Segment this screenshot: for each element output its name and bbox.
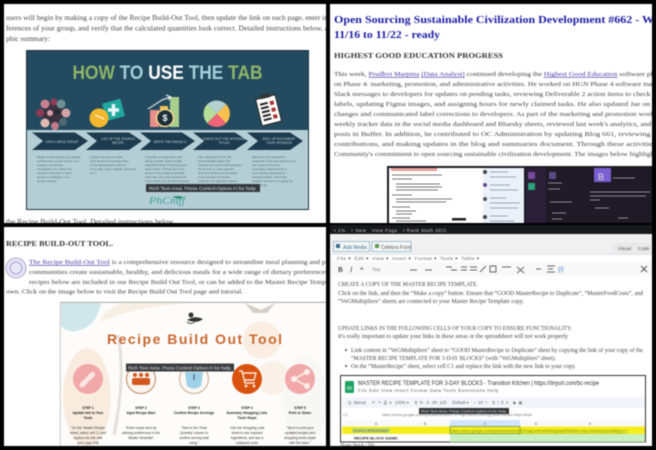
article body: weekly tracker data in the social media dashboard and Bluesky sheets, reviewed last week's analytics, and s: [334, 121, 656, 128]
panel: wordpress editor: Share Stock / Dir: [340, 444, 375, 448]
step descriptions: the recipe of the tool,: [252, 163, 281, 167]
article body: Slack messages to developers for updates on pending tasks, reviewing Deliverable 2 action items to check p: [334, 91, 656, 98]
icon: people group: [36, 98, 70, 130]
editor content: It's really important to update your links in these areas or the spreadsheet will not work properly: [338, 334, 568, 340]
editor content: [332, 276, 652, 446]
step descriptions: ingredients, and see a: [231, 436, 263, 440]
icon: round seal: [6, 258, 26, 278]
tooltip: Rich Text Area. Press Control-Option-H for help.: [128, 366, 232, 370]
step descriptions: "Send or print your: [286, 426, 315, 430]
editor tabs: Code: [638, 246, 650, 252]
step descriptions: [37, 155, 296, 187]
formatting toolbar: I: [349, 266, 353, 274]
tooltip: Rich Text Area. Press Control-Option-H for help.: [149, 186, 257, 191]
intro text: own. Click on the image below to visit the Recipe Build Out Tool page and tutorial.: [6, 288, 243, 296]
admin bar: [330, 225, 652, 234]
step descriptions: necessary adjustments to: [252, 167, 287, 171]
panel: wordpress editor: [330, 225, 652, 448]
step descriptions: "Use the Shopping Lists: [229, 426, 265, 430]
panel: recipe build-out tool: [4, 227, 329, 448]
tooltip: [146, 184, 260, 192]
step captions: [73, 406, 311, 420]
icon: capsule and plus: [90, 99, 125, 128]
icon: people step: [126, 364, 156, 394]
step descriptions: group in a diagram on a: [37, 175, 70, 179]
icon: cart step: [232, 364, 262, 394]
step descriptions: ingredient base is being grown: [145, 163, 187, 167]
chevron labels: ROLL UP DOCUMENT: [263, 137, 295, 141]
intro text: The Recipe Build-Out Tool is a comprehensive resource designed to streamline meal planning and pr: [29, 259, 329, 266]
article title: Open Sourcing Sustainable Civilization Development #662 - W: [334, 15, 655, 26]
logo bird: [187, 312, 203, 324]
step descriptions: having recipes, check the: [252, 175, 287, 179]
editor content: On the “MasterRecipe” sheet, select cell C1 and replace the link with the new link to your copy.: [351, 363, 576, 370]
step descriptions: Based on the calculated: [252, 155, 285, 159]
step captions: Update link to Your: [73, 411, 104, 415]
article body: on Phase 4: marketing, promotion, and administrative activities. He worked on HGN Phase 4 software man: [334, 81, 656, 88]
editor content: Click on the link, and then the “Make a copy” button. Ensure that “GOOD MasterRecipe to Duplicate”, “MasterFoodCosts”, and: [338, 290, 643, 297]
step descriptions: flexitarians, etc. Enter the: [37, 167, 72, 171]
media buttons: [334, 242, 412, 252]
formatting toolbar: “: [360, 266, 364, 274]
formatting toolbar: B: [338, 266, 343, 274]
step captions: Tools: [84, 416, 93, 420]
recipe block name row: RECIPE BLOCK NAME:: [354, 436, 398, 440]
admin bar: ▪ 1% + New View Page ▪ Rank Math SEO: [334, 228, 446, 234]
screenshot collage: [387, 166, 655, 224]
step captions: STEP 3: [188, 406, 200, 410]
formatting toolbar: [337, 264, 648, 274]
step descriptions: using.": [189, 441, 200, 445]
step descriptions: group of two regions detailed: [145, 171, 185, 175]
step descriptions: number of people in each: [37, 171, 72, 175]
chevron labels: GATH LARGE GROUP: [46, 140, 78, 144]
spreadsheet screenshot: C1: [343, 413, 348, 417]
yellow source row: [342, 426, 645, 434]
article body: posts in Buffer. In addition, he contributed to OC Administration by updating Blog 661, reviewing c: [334, 131, 656, 138]
spreadsheet screenshot: MASTER RECIPE TEMPLATE FOR 3-DAY BLOCKS - Transition Kitchen | https://tinyurl.com/bc-recipe: [358, 381, 600, 387]
logo: PhCmff: [148, 195, 187, 207]
step descriptions: with the team.": [289, 441, 312, 445]
section heading: HIGHEST GOOD EDUCATION PROGRESS: [334, 51, 503, 60]
editor content: “VeGMultipliers” sheets are connected to your Master Recipe Template copy.: [338, 298, 524, 305]
chevron labels: TITLES: [219, 141, 229, 145]
column headers: B: [424, 422, 427, 426]
article body: [334, 71, 656, 158]
infographic title: HOW TO USE THE TAB: [72, 63, 262, 84]
spreadsheet screenshot: https://docs.google.com/spreadsheets/d/1VFmgLm6mA2NM3gOpfAPh8blkx-h4pLmhds: [382, 413, 532, 417]
chevron labels: WRITE THE RANGE S: [154, 140, 186, 144]
article body: changes and communicated label corrections to developers. As part of the marketing and promotion work,: [334, 111, 656, 118]
step captions: Confirm Recipe Servings: [174, 411, 214, 415]
intro text: recipes below are included in our Recipe Build Out Tool, or can be added to the Master Recipe Templ: [29, 279, 328, 286]
step descriptions: The calculated Trust will: [198, 155, 231, 159]
image: recipe build out tool: [60, 302, 328, 448]
step descriptions: Quantity' column to: [180, 431, 208, 435]
step descriptions: Update the tool to make: [90, 155, 123, 159]
column headers: D: [535, 422, 538, 426]
step descriptions: clicking preferences in the: [122, 431, 160, 435]
spreadsheet screenshot: [340, 376, 646, 442]
step descriptions: matches the adjusted values: [198, 179, 238, 183]
icon: jar step: [178, 371, 210, 394]
editor content: Link content in “VeGMultipliers” sheet to “GOOD MasterRecipe to Duplicate” sheet by copying the link of your copy of the: [351, 347, 643, 354]
step descriptions: replace the link with: [74, 436, 103, 440]
icon: sheets: [345, 381, 354, 393]
tool title: Recipe Build Out Tool: [107, 331, 282, 347]
tooltip: [126, 364, 234, 372]
intro text: users will begin by making a copy of the Recipe Build-Out Tool, then update the link on each page, enter in: [6, 15, 329, 22]
step descriptions: need entries ID and find outward: [145, 179, 190, 183]
step descriptions: materials in the big selection for: [252, 159, 296, 163]
step captions: Summary Shopping Lists: [227, 411, 268, 415]
step captions: Input Recipe Bars: [127, 411, 156, 415]
recipe block name row: [354, 434, 645, 442]
article body: Community's commitment to open sourcing sustainable civilization development. The images below highlight: [334, 151, 656, 158]
menu bar: [332, 256, 652, 262]
media buttons: Add Media: [343, 245, 367, 251]
step descriptions: the to four or more groups: [198, 167, 234, 171]
step descriptions: Consider serving sizes and: [145, 155, 182, 159]
step descriptions: regular unit cost to add updated: [198, 163, 242, 167]
step descriptions: and how ideals per humanity: [198, 171, 238, 175]
icon: bar chart with coin: $: [162, 113, 168, 123]
panel: how to use the tab: [4, 4, 329, 226]
step descriptions: dietary needs. Each weight: [145, 159, 182, 163]
step descriptions: Begin by identifying your dietary: [37, 155, 81, 159]
step descriptions: your dietary preferences: [252, 171, 286, 175]
step captions: STEP 4: [241, 406, 253, 410]
media buttons: Celebra Form: [381, 245, 412, 251]
step descriptions: confirm serving total: [179, 436, 209, 440]
step descriptions: [70, 426, 316, 445]
column headers: A: [375, 422, 378, 426]
step descriptions: (e.g. bulk, local, organic, discount,: [90, 167, 137, 171]
yellow source row: https://docs.google.com/spreadsheets/d/1VFmgLm6mA2NM3gOpfAPh8blkx-h4pLmhdsWxyZ/edit#gid=0: [451, 429, 627, 433]
editor content: “MASTER RECIPE TEMPLATE FOR 3-DAY BLOCKS” (with “VeGMultipliers” sheet).: [351, 355, 556, 362]
column headers: [342, 420, 645, 426]
chevron labels: CHECK OUT THE SPONSOR: [203, 137, 246, 141]
chevron labels: RECIPE: [112, 141, 124, 145]
screenshot collage: B: [598, 172, 604, 182]
chevron labels: LIST UP THE SOURCE: [101, 137, 135, 141]
column headers: E: [589, 422, 592, 426]
step captions: STEP 5: [294, 406, 306, 410]
icon: link step: [73, 364, 103, 394]
intro text: [6, 259, 329, 296]
chevron labels: YOUR SPONSOR: [266, 141, 293, 145]
icon: bar chart with coin: [148, 95, 179, 127]
step descriptions: each week. It helps by in the: [145, 167, 184, 171]
step captions: STEP 1: [82, 406, 94, 410]
step descriptions: detailed amount of a guide for: [252, 179, 293, 183]
step descriptions: sheet, select cell C1 and: [70, 431, 106, 435]
icon: sheets: m: [347, 386, 352, 392]
step descriptions: Master Template": [128, 436, 155, 440]
intro text: ferences of your group, and verify that the calculated quantities look correct. Detailed instructions below, a: [6, 26, 328, 32]
step descriptions: "Enter recipe lines by: [125, 426, 157, 430]
step descriptions: "Next is the 'Final: [181, 426, 207, 430]
intro text: [6, 15, 329, 226]
section heading: RECIPE BUILD-OUT TOOL.: [6, 241, 113, 248]
article title: 11/16 to 11/22 - ready: [334, 30, 441, 41]
step descriptions: etc.).: [90, 171, 97, 175]
step descriptions: collapsed order: [236, 441, 259, 445]
panel: blog progress article: [330, 4, 656, 224]
chevron labels: [46, 137, 295, 145]
step captions: STEP 2: [135, 406, 147, 410]
step descriptions: your copy. Edit: [77, 441, 99, 445]
step descriptions: updated recipes and: [285, 431, 315, 435]
editor content: CREATE A COPY OF THE MASTER RECIPE TEMPLATE.: [338, 282, 478, 288]
tooltip: Rich Text Area. Press Control-Option-H for help.: [421, 408, 507, 414]
icon: share step: [285, 364, 315, 394]
step descriptions: each site your ratio serving for: [145, 175, 186, 179]
menu bar: File ▾ Edit ▾ View ▾ Insert ▾ Format ▾ Tools ▾ Table ▾: [337, 256, 480, 262]
step descriptions: in the appropriate columns: [90, 163, 127, 167]
editor tabs: [617, 246, 650, 251]
step descriptions: vegans, omnivores,: [37, 163, 64, 167]
infographic: how to use the tab: [26, 50, 308, 210]
step captions: Print or Share: [289, 411, 311, 415]
article body: contributions, and making updates in the blog and summaries document. Through these activities: [334, 141, 656, 148]
process chevrons: [32, 132, 303, 150]
column headers: C: [484, 422, 487, 426]
editor tabs: Visual: [618, 246, 631, 252]
editor content: UPDATE LINKS IN THE FOLLOWING CELLS OF YOUR COPY TO ENSURE FUNCTIONALITY.: [338, 326, 572, 332]
formatting toolbar: Tiny: [372, 267, 381, 272]
step descriptions: preferences of your group, e.g.: [37, 159, 79, 163]
article body: This week, Prudhvi Marpina (Data Analyst) continued developing the Highest Good Education software pla: [334, 71, 656, 78]
icon: clipboard: [255, 92, 282, 126]
step descriptions: sheet to see required: [232, 431, 263, 435]
spreadsheet screenshot: Q Menus ↶ ↷ ⎙ ▾ 100% ▾ $ % .0 .00 123 Default ▾ − 10 + B I S A ◆ ▦ ⫶: [348, 400, 526, 405]
step descriptions: your group.: [252, 183, 268, 187]
yellow source row: SOURCE SPREADSHEET: [353, 429, 390, 433]
intro text: the Recipe Build-Out Tool. Detailed instructions below.: [6, 219, 175, 226]
step descriptions: "On the 'Master Recipe': [71, 426, 106, 430]
article title: [334, 15, 655, 41]
step descriptions: shopping forms share: [284, 436, 316, 440]
step descriptions: if the number of recipes: [198, 175, 231, 179]
intro text: phic summary:: [6, 36, 50, 43]
icon: pie: [203, 100, 230, 127]
formatting toolbar: {/}: [558, 267, 564, 273]
step descriptions: simple section.: [37, 179, 58, 183]
intro text: communities create sustainable, healthy, and delicious meals for a wide range of dietary preferences: [29, 269, 328, 276]
step descriptions: your desired sourcing prices: [90, 159, 129, 163]
article body: labels, updating Figma images, and assigning hours for newly claimed tasks. He also updated Jae on p: [334, 101, 656, 108]
step captions: Tools Stops: [237, 416, 257, 420]
spreadsheet screenshot: File Edit View Insert Format Data Tools Extensions Help: [358, 388, 499, 393]
step descriptions: automatically adjust the: [198, 159, 231, 163]
